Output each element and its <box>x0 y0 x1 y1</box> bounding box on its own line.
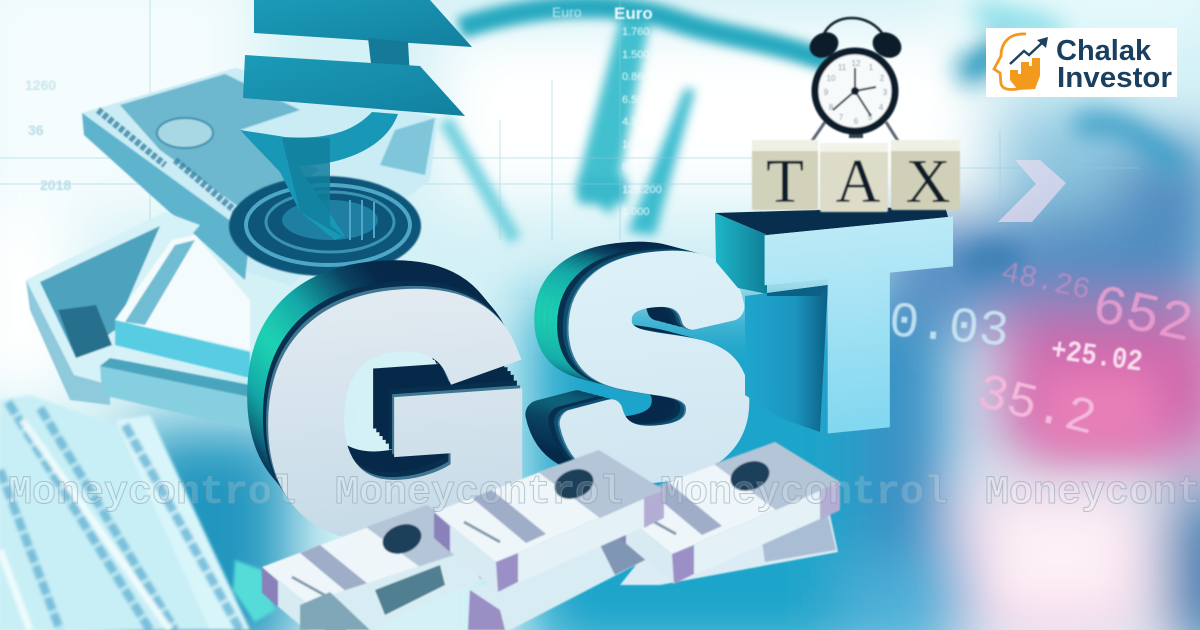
chart figures behind the letters: 128.200 <box>622 184 662 196</box>
letter G: G <box>263 220 524 596</box>
letter S: S <box>562 197 746 538</box>
alarm clock: 6 <box>854 117 859 126</box>
logo wordmark: Chalak <box>1056 35 1152 67</box>
chart figures behind the letters: 1.000 <box>622 206 650 218</box>
chart figures behind the letters: 36 <box>28 122 44 138</box>
left stacks of rupee notes <box>26 212 252 430</box>
watermark: Moneycontrol <box>335 471 623 516</box>
chart figures behind the letters <box>25 4 662 218</box>
TAX wooden cubes <box>752 140 960 216</box>
chart figures behind the letters: Euro <box>614 4 653 23</box>
letter G: G <box>250 203 512 578</box>
upper stack of rupee notes <box>82 68 438 285</box>
alarm clock: 7 <box>839 113 844 122</box>
chart figures behind the letters: 2018 <box>40 177 71 193</box>
cube T: T <box>766 148 804 216</box>
watermark: Moneycontrol <box>8 471 296 516</box>
alarm clock: 12 <box>852 59 861 68</box>
watermark <box>8 471 1200 516</box>
alarm clock: 11 <box>838 63 847 72</box>
chart figures behind the letters: 0.860 <box>622 71 650 83</box>
stock figures on the right <box>887 257 1198 450</box>
letter S: S <box>547 192 731 533</box>
letter S: S <box>558 195 742 536</box>
alarm clock: 3 <box>883 88 888 97</box>
chart figures behind the letters: 4.30 <box>622 116 643 128</box>
logo icon: head with chart <box>994 34 1048 90</box>
letter S: S <box>541 191 725 531</box>
alarm clock: 8 <box>829 103 834 112</box>
letter S: S <box>530 188 714 528</box>
stock figures on the right: 652 <box>1086 274 1198 358</box>
GST 3D letters <box>247 169 948 605</box>
chart figures behind the letters: 80.01 <box>622 161 650 173</box>
letter G: G <box>260 214 521 590</box>
cube A <box>820 143 888 216</box>
cube X: X <box>906 148 950 216</box>
chevron arrow <box>998 160 1066 222</box>
bottom rupee bundles <box>262 442 840 630</box>
watermark: Moneycontrol <box>660 471 948 516</box>
cube A: A <box>836 148 881 216</box>
chart figures behind the letters: 1260 <box>25 77 56 93</box>
letter S: S <box>564 197 748 537</box>
alarm clock: 10 <box>827 74 836 83</box>
letter G: G <box>247 199 508 575</box>
letter G: G <box>253 206 515 582</box>
letter S: S <box>553 194 736 534</box>
stock figures on the right: 35.2 <box>971 365 1101 450</box>
logo: Chalak Investor <box>986 28 1177 97</box>
chart figures behind the letters: Euro <box>552 4 582 20</box>
cube T <box>752 140 818 216</box>
cube X <box>891 140 960 216</box>
bottom-left loose notes <box>0 395 275 630</box>
logo: Chalak Investor: Investor <box>1057 62 1172 94</box>
letter G: G <box>268 227 529 603</box>
letter S: S <box>535 189 719 530</box>
stock figures on the right: 0.03 <box>887 294 1011 361</box>
letter G: G <box>256 210 518 586</box>
alarm clock <box>805 18 906 141</box>
chart figures behind the letters: 1.760 <box>622 26 650 38</box>
letter G: G <box>266 225 527 600</box>
chart figures behind the letters: 1.500 <box>622 49 650 61</box>
rupee symbol with coil base <box>229 0 472 276</box>
alarm clock: 1 <box>869 63 874 72</box>
chart figures behind the letters: 6.50 <box>622 94 643 106</box>
alarm clock: 4 <box>879 103 884 112</box>
alarm clock: 2 <box>880 74 885 83</box>
stock figures on the right: 48.26 <box>998 257 1093 308</box>
chart figures behind the letters: 10.05 <box>622 139 650 151</box>
alarm clock: 9 <box>824 88 829 97</box>
alarm clock: 5 <box>868 113 873 122</box>
stock figures on the right: +25.02 <box>1049 334 1144 381</box>
letter T: T <box>772 169 946 486</box>
